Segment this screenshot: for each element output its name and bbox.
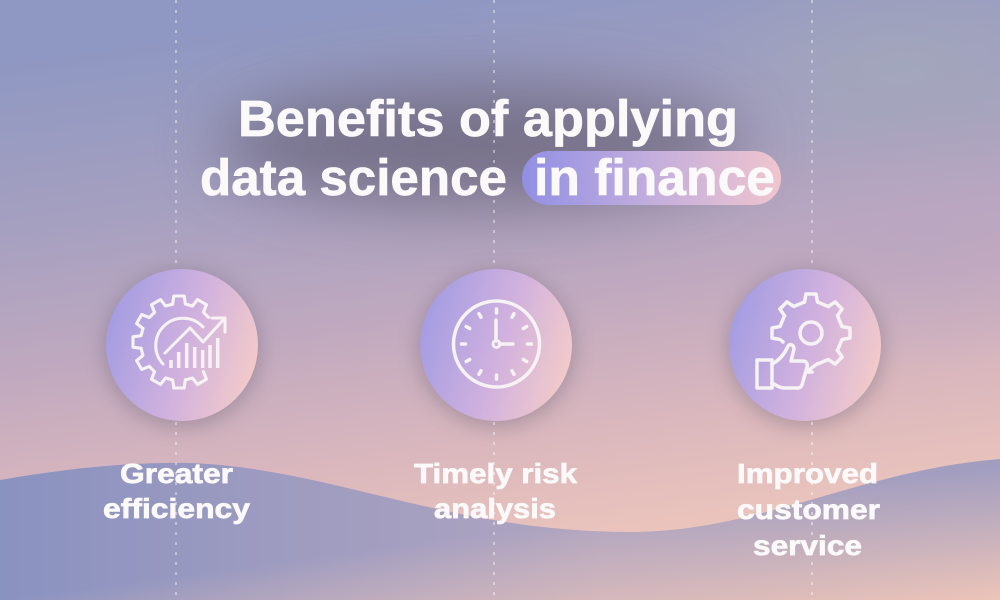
wave at the bottom — [0, 459, 1000, 600]
title highlighted words: in finance — [534, 149, 775, 206]
benefit 1: greater efficiency — [104, 269, 260, 427]
label: timely risk analysis: Timely risk — [414, 458, 577, 489]
label: timely risk analysis: analysis — [434, 493, 556, 524]
dotted vertical guide lines — [176, 0, 812, 600]
title highlight pill — [522, 151, 781, 205]
label: greater efficiency — [103, 458, 250, 524]
benefit 3: improved customer service — [727, 269, 883, 427]
title line 1: Benefits of applying — [238, 90, 738, 147]
disc — [729, 269, 881, 421]
icon: clock — [454, 301, 540, 387]
disc shadow — [104, 271, 260, 427]
label: improved customer service: service — [753, 530, 862, 561]
label: timely risk analysis — [414, 458, 577, 524]
label: improved customer service — [737, 458, 880, 561]
title shadow — [215, 83, 745, 207]
disc — [106, 269, 258, 421]
disc shadow — [418, 271, 574, 427]
disc shadow — [727, 271, 883, 427]
label: greater efficiency: efficiency — [103, 493, 250, 524]
icon: gear with rising chart — [132, 295, 225, 389]
title line 2: data science — [200, 149, 507, 206]
title — [200, 90, 781, 206]
benefit 2: timely risk analysis — [418, 269, 574, 427]
label: improved customer service: Improved — [737, 458, 878, 489]
disc — [420, 269, 572, 421]
label: greater efficiency: Greater — [120, 458, 233, 489]
icon: gear and thumbs up — [757, 293, 851, 388]
label: improved customer service: customer — [737, 494, 880, 525]
